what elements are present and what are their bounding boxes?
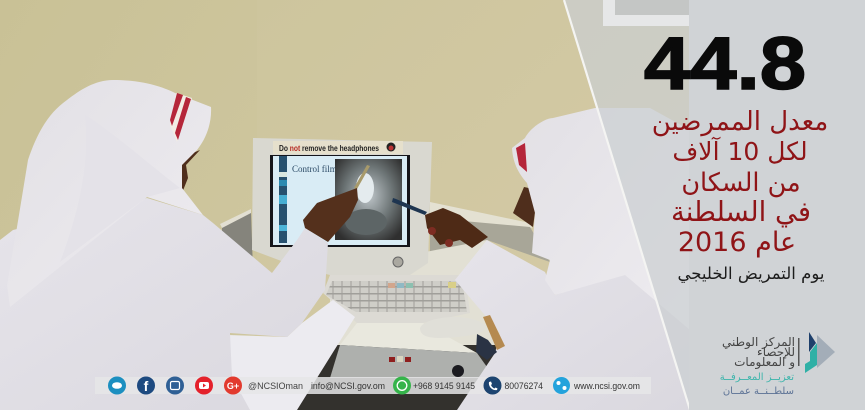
logo country: سلطــنــة عمــان xyxy=(723,386,794,397)
icon: facebook xyxy=(137,376,155,394)
logo text: المركز الوطني xyxy=(722,335,795,350)
icon: instagram xyxy=(166,376,184,394)
subtitle: يوم التمريض الخليجي xyxy=(678,264,825,284)
monitor: Do not remove the headphones xyxy=(279,143,379,153)
website: www.ncsi.gov.om xyxy=(573,381,640,392)
wooden item and dark pouch xyxy=(483,315,505,350)
description text: من السكان xyxy=(681,168,801,198)
hand xyxy=(303,188,358,242)
icon: globe xyxy=(553,377,570,394)
description text xyxy=(652,107,828,258)
scarf xyxy=(7,80,211,307)
description text: لكل 10 آلاف xyxy=(672,136,808,166)
translucent diagonal overlay xyxy=(564,0,690,410)
coat xyxy=(455,240,690,410)
face xyxy=(176,150,200,198)
contact bar xyxy=(95,376,651,394)
paper stack xyxy=(228,300,355,410)
phone number: +968 9145 9145 xyxy=(413,381,475,392)
white diagonal line xyxy=(564,0,690,410)
main statistic: 44.8 xyxy=(644,22,806,105)
right nurse xyxy=(425,108,690,410)
description text: عام 2016 xyxy=(678,227,796,258)
toll free number: 80076274 xyxy=(504,381,543,392)
face xyxy=(513,187,538,227)
icon: twitter xyxy=(108,376,126,394)
icon: youtube xyxy=(195,376,213,394)
description text: في السلطنة xyxy=(671,196,811,228)
icon: phone xyxy=(484,376,502,394)
monitor: Control film xyxy=(292,164,337,174)
scarf xyxy=(512,108,690,330)
frame on wall xyxy=(603,0,689,26)
desk and background objects xyxy=(220,202,550,410)
keyboard xyxy=(323,275,470,323)
logo slogan: تعزيــز المعــرفــة xyxy=(720,372,794,383)
icon: whatsapp xyxy=(393,376,411,394)
logo text: للإحصاء xyxy=(757,345,795,359)
logo text: و المعلومات xyxy=(734,355,795,370)
monitor xyxy=(252,138,432,275)
hand xyxy=(425,208,488,248)
coat xyxy=(0,198,328,410)
description text: معدل الممرضين xyxy=(652,107,828,137)
icon: facebook: f xyxy=(144,378,149,394)
right gray panel xyxy=(689,0,865,410)
mouse xyxy=(420,317,485,338)
cap stripes xyxy=(170,93,192,142)
logo divider xyxy=(798,338,800,366)
icon: google plus xyxy=(224,376,242,394)
left nurse xyxy=(0,80,358,410)
social handle: @NCSIOman xyxy=(248,381,303,392)
logo xyxy=(720,332,835,397)
email: info@NCSI.gov.om xyxy=(311,381,385,392)
logo mark xyxy=(805,332,835,373)
icon: google plus: G+ xyxy=(227,381,239,391)
device on desk xyxy=(330,323,487,378)
logo text xyxy=(722,335,795,370)
